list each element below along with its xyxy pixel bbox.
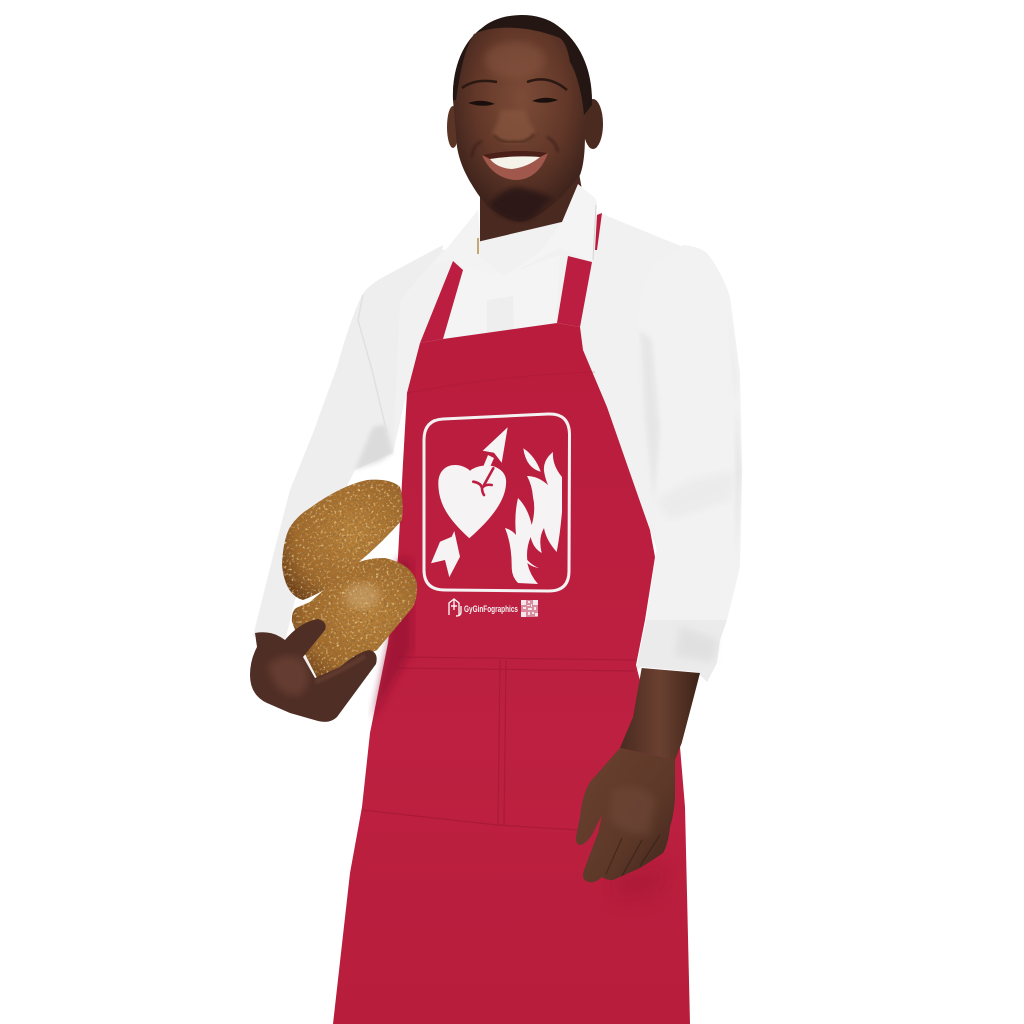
icon: flames — [505, 448, 562, 584]
hand holding bread — [250, 619, 377, 722]
shirt: collar — [432, 210, 505, 276]
emblem: heart arrow and flames — [424, 414, 570, 617]
ear right — [583, 99, 603, 149]
apron: pocket stitching — [362, 657, 635, 830]
shirt: cuff — [636, 620, 727, 682]
apron — [333, 213, 690, 1024]
nose — [492, 110, 535, 142]
right forearm and hand — [576, 668, 700, 882]
apron: body — [333, 323, 690, 1024]
icon: arrow fletching — [431, 531, 460, 577]
logo: GyGinFographics — [449, 599, 538, 617]
face — [453, 16, 590, 222]
mouth — [482, 151, 548, 180]
neck — [480, 150, 582, 274]
goatee — [490, 187, 552, 221]
head and face — [447, 15, 603, 222]
bread loaves and left hand — [250, 480, 417, 722]
eyes — [468, 98, 558, 106]
shirt: left sleeve — [253, 245, 443, 641]
shirt: right sleeve — [638, 245, 742, 620]
forehead highlight — [485, 42, 545, 78]
shirt: body and sleeves — [253, 184, 742, 682]
QR code — [521, 600, 538, 617]
bread: lower loaf — [292, 558, 417, 678]
apron: neck straps — [420, 261, 463, 343]
ear left — [447, 106, 459, 148]
hair — [453, 15, 592, 115]
necklace — [477, 238, 479, 254]
icon: arrow slit in heart — [473, 468, 493, 495]
shirt: torso — [393, 213, 683, 550]
icon: arrow shaft — [481, 455, 494, 474]
hand — [576, 748, 675, 882]
brows — [462, 79, 567, 90]
bread: upper loaf — [282, 480, 403, 600]
icon: heart — [438, 465, 506, 538]
teeth — [490, 156, 540, 169]
forearm — [620, 668, 700, 760]
apron: hemline — [407, 372, 595, 393]
logo text: GyGinFographics — [464, 604, 518, 615]
apron: shadow folds — [610, 865, 672, 900]
emblem frame — [424, 414, 570, 591]
shirt: shading — [640, 330, 660, 500]
shirt: placket — [443, 255, 560, 340]
icon: arrow head — [483, 427, 508, 463]
logo mark — [449, 599, 461, 616]
smile lines — [472, 137, 558, 157]
